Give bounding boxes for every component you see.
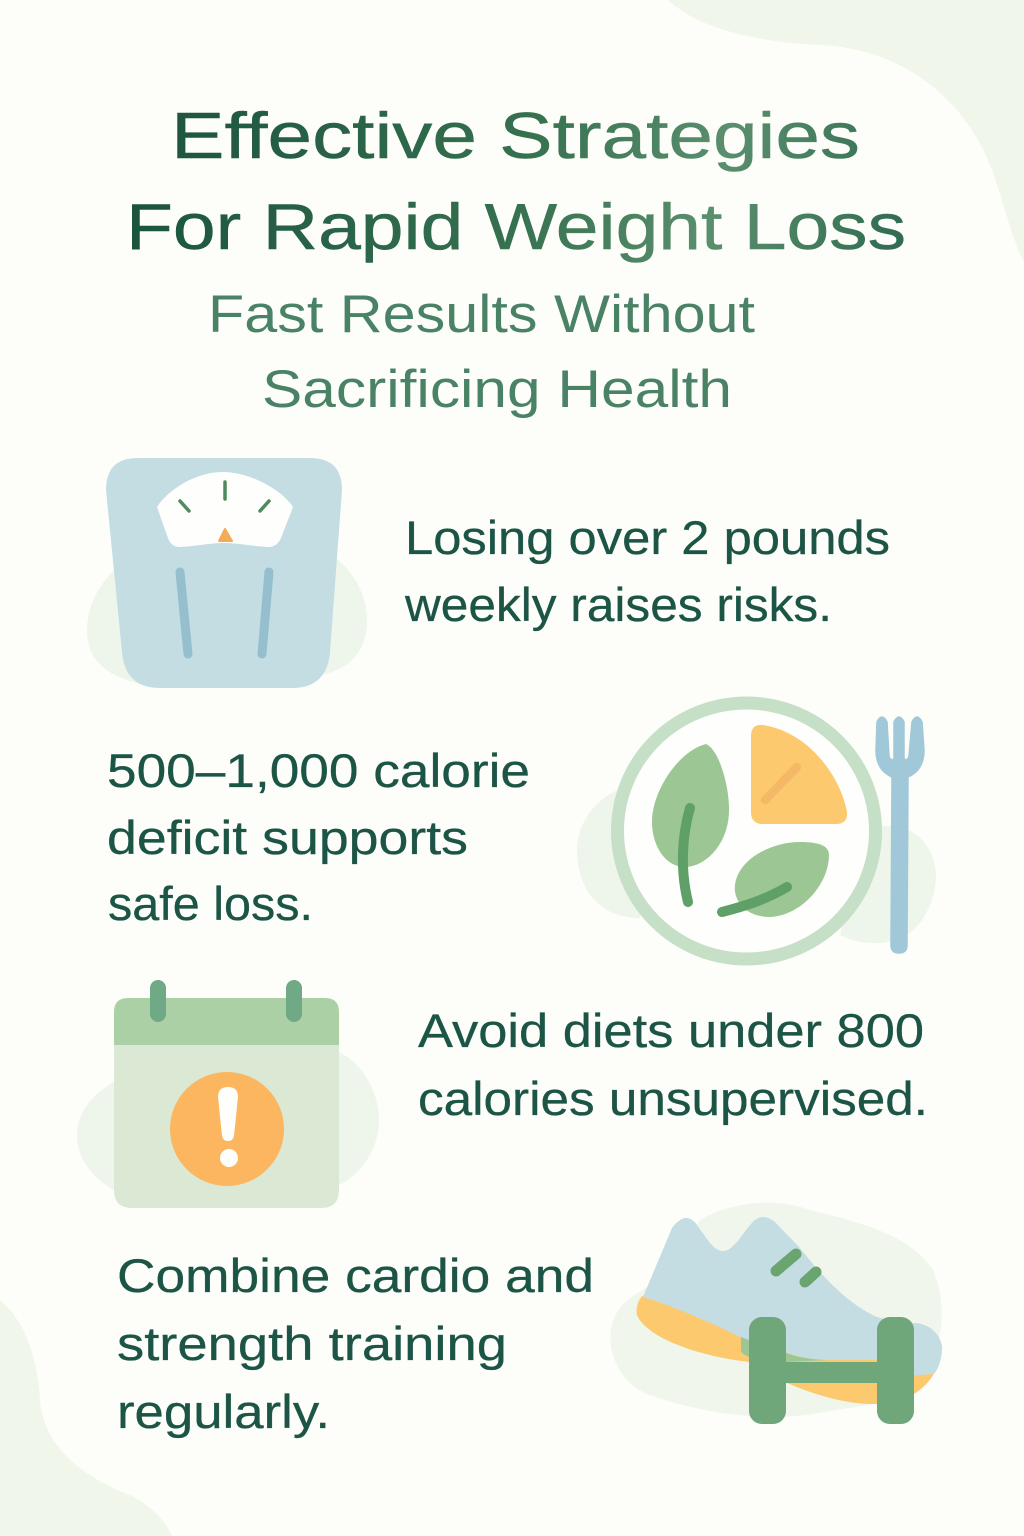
text: combine training [117, 1249, 594, 1438]
text: combine training: Combine cardio and [117, 1249, 594, 1302]
icon: bathroom scale [87, 458, 367, 688]
background blob: top right [668, 0, 1024, 262]
title: For Rapid Weight Loss [126, 190, 906, 263]
text: avoid low calorie diets: calories unsupervised. [418, 1072, 928, 1125]
icon: shoe and dumbbell [610, 1203, 942, 1424]
text: calorie deficit [107, 744, 530, 930]
text: combine training: regularly. [117, 1385, 330, 1438]
icon: plate and fork [577, 703, 936, 959]
text: calorie deficit: safe loss. [108, 877, 313, 930]
text: weekly loss risk [404, 511, 890, 631]
text: weekly loss risk: weekly raises risks. [404, 578, 832, 631]
text: avoid low calorie diets: Avoid diets under 800 [418, 1004, 924, 1057]
subtitle: Fast Results Without [208, 285, 755, 344]
text: combine training: strength training [117, 1317, 507, 1370]
title [126, 99, 906, 263]
text: calorie deficit: deficit supports [107, 811, 468, 864]
background blob: bottom left [0, 1300, 172, 1536]
text: weekly loss risk: Losing over 2 pounds [405, 511, 890, 564]
title: Effective Strategies [171, 99, 860, 172]
icon: calendar with warning [77, 980, 379, 1208]
text: avoid low calorie diets [418, 1004, 928, 1125]
subtitle [208, 285, 755, 419]
text: calorie deficit: 500–1,000 calorie [107, 744, 530, 797]
subtitle: Sacrificing Health [262, 360, 732, 419]
